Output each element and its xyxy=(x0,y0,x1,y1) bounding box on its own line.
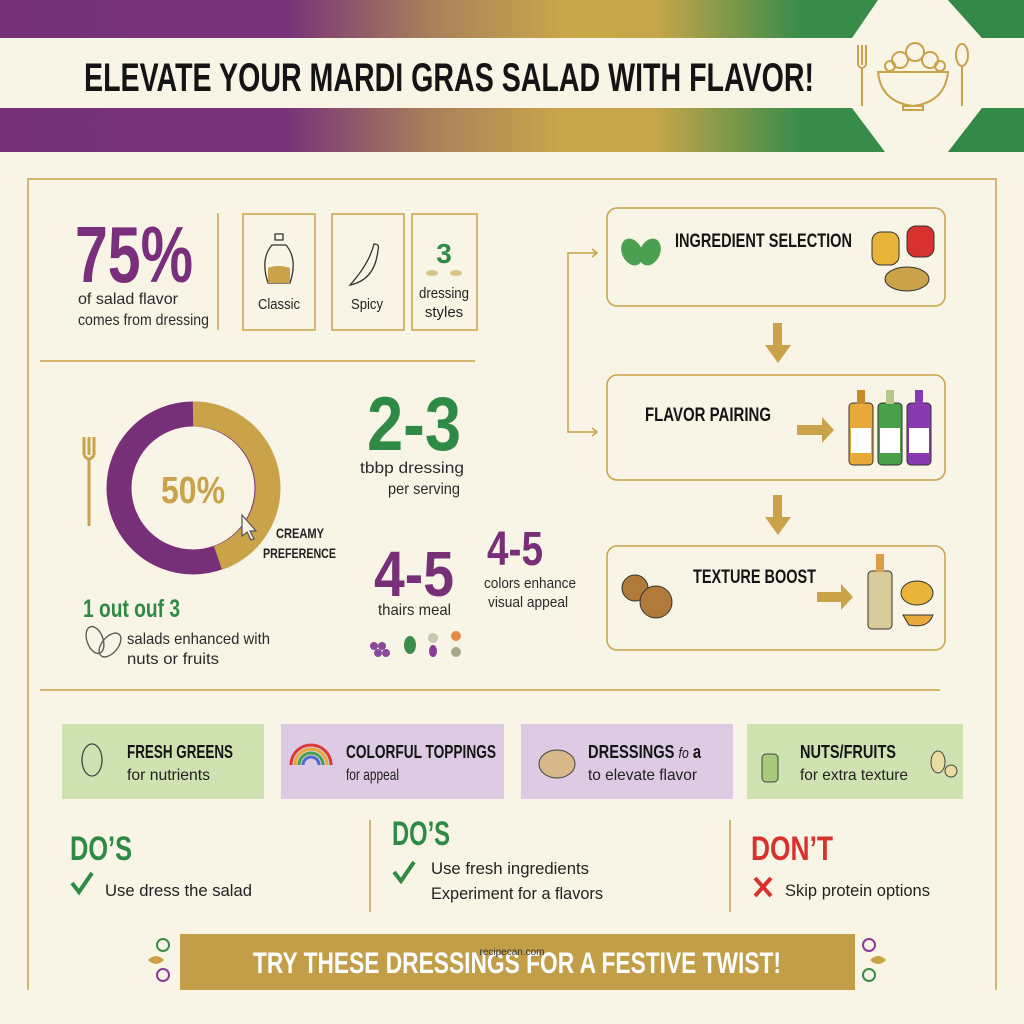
card: nuts/fruits xyxy=(747,724,963,799)
don't: Skip protein options xyxy=(785,881,930,900)
stat: 75%: of salad flavor xyxy=(78,291,179,308)
icon: salad bowl xyxy=(858,43,968,110)
do's 2: DO’S xyxy=(392,815,450,853)
banner: recipecan.com xyxy=(479,947,545,958)
donut chart: 50% xyxy=(161,470,225,512)
panel: ingredient selection xyxy=(607,208,945,306)
box: 3 dressing styles: 3 xyxy=(436,238,452,269)
box: 3 dressing styles xyxy=(412,214,477,330)
do's 2 xyxy=(392,815,603,903)
card: dressings xyxy=(521,724,733,799)
box: spicy xyxy=(332,214,404,330)
card: dressings: DRESSINGS fo a xyxy=(588,742,702,762)
stat: 4-5 colors: visual appeal xyxy=(488,594,568,611)
panel: ingredient selection: INGREDIENT SELECTION xyxy=(675,231,852,252)
do's 1: Use dress the salad xyxy=(105,881,252,900)
box: 3 dressing styles: dressing xyxy=(419,285,469,302)
card: colorful toppings: COLORFUL TOPPINGS xyxy=(346,742,496,762)
card: fresh greens xyxy=(62,724,264,799)
stat: 1 out of 3: 1 out ouf 3 xyxy=(83,595,180,623)
card: colorful toppings: for appeal xyxy=(346,767,399,784)
panel: flavor pairing: FLAVOR PAIRING xyxy=(645,405,771,426)
stat: 75% xyxy=(75,210,218,330)
do's 2: Experiment for a flavors xyxy=(431,884,603,903)
donut chart xyxy=(84,414,336,562)
banner xyxy=(148,934,886,990)
donut chart: PREFERENCE xyxy=(263,545,336,561)
do's 1: DO’S xyxy=(70,830,132,868)
stat: 4-5 meal: thairs meal xyxy=(378,602,451,619)
banner: TRY THESE DRESSINGS FOR A FESTIVE TWIST! xyxy=(253,947,781,980)
stat: 4-5 colors xyxy=(484,523,576,611)
stat: 4-5 meal xyxy=(370,538,461,657)
panel: flavor pairing xyxy=(607,375,945,480)
don't: DON’T xyxy=(751,830,833,868)
stat: 2-3: tbbp dressing xyxy=(360,460,464,477)
box: 3 dressing styles: styles xyxy=(425,304,463,321)
panel: texture boost xyxy=(607,546,945,650)
stat: 2-3 xyxy=(360,382,464,498)
arrow: down 1 xyxy=(765,323,791,363)
frame xyxy=(28,179,996,990)
card: nuts/fruits: for extra texture xyxy=(800,767,908,784)
card: fresh greens: for nutrients xyxy=(127,767,210,784)
stat: 75%: 75% xyxy=(75,210,193,299)
stat: 2-3: 2-3 xyxy=(367,382,461,467)
connector arrow xyxy=(568,249,597,436)
stat: 2-3: per serving xyxy=(388,481,460,498)
card: fresh greens: FRESH GREENS xyxy=(127,742,233,762)
card: nuts/fruits: NUTS/FRUITS xyxy=(800,742,896,762)
stat: 75%: comes from dressing xyxy=(78,312,209,329)
stat: 4-5 colors: colors enhance xyxy=(484,575,576,592)
card: dressings: to elevate flavor xyxy=(588,767,698,784)
stat: 1 out of 3: salads enhanced with xyxy=(127,631,270,648)
donut chart: CREAMY xyxy=(276,525,325,541)
don't xyxy=(751,830,930,900)
do's 1 xyxy=(70,830,252,900)
box: spicy: Spicy xyxy=(351,296,383,313)
card: colorful toppings xyxy=(281,724,504,799)
box: classic: Classic xyxy=(258,296,300,313)
panel: texture boost: TEXTURE BOOST xyxy=(693,567,816,588)
stat: 4-5 colors: 4-5 xyxy=(487,523,543,576)
stat: 1 out of 3 xyxy=(83,595,270,668)
stat: 1 out of 3: nuts or fruits xyxy=(127,651,219,668)
box: classic xyxy=(243,214,315,330)
do's 2: Use fresh ingredients xyxy=(431,859,589,878)
stat: 4-5 meal: 4-5 xyxy=(374,538,454,610)
arrow: down 2 xyxy=(765,495,791,535)
header band xyxy=(0,0,1024,152)
